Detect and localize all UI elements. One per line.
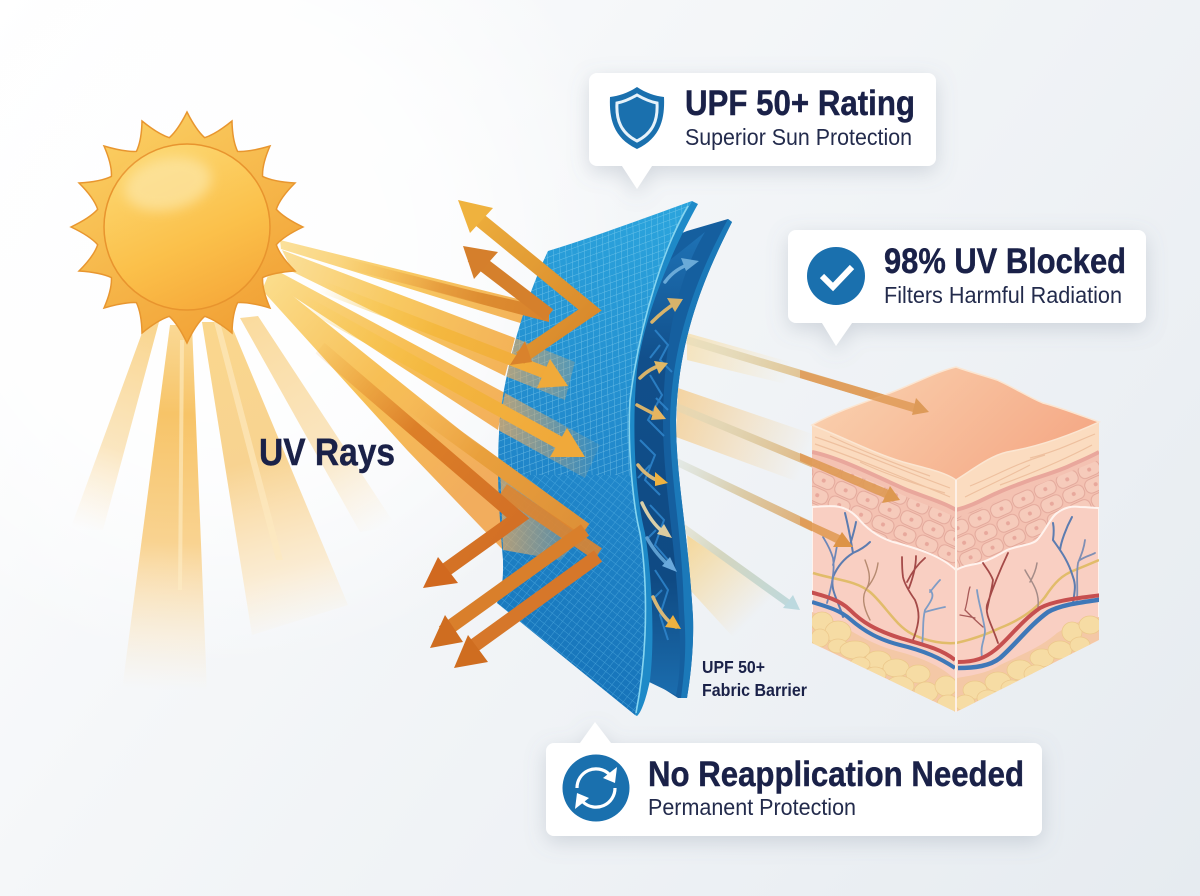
- callout box: [589, 73, 936, 189]
- arrow: incoming dark ray: [420, 279, 549, 322]
- sun disc: [104, 144, 270, 310]
- icon: check mark: [807, 247, 865, 305]
- sun: [71, 112, 303, 343]
- downward sun rays: [70, 316, 396, 690]
- callout: UPF 50+ Rating: [589, 73, 936, 189]
- arrow: chevron two incoming: [410, 403, 585, 530]
- nerve left: [813, 573, 956, 643]
- sun spikes: [71, 112, 303, 343]
- arrow: to skin surface: [800, 370, 916, 412]
- arrow: chevron three outgoing: [468, 556, 598, 650]
- skin left face: [812, 426, 955, 712]
- arrow: fading ray head: [783, 595, 800, 610]
- arrow: reflected ray up-left: [472, 256, 549, 315]
- transmitted arrow shafts leaving the fabric, drawn behind it: [660, 331, 916, 606]
- arrow: to dermis: [800, 517, 842, 544]
- transmitted arrowheads on fabric: [537, 359, 585, 457]
- capillaries left: [823, 513, 945, 645]
- reflected arrows: lower chevrons: [320, 348, 598, 668]
- skin cross-section cube: [805, 367, 1105, 720]
- rays striking the fabric: [262, 240, 535, 550]
- callout box: [546, 722, 1042, 836]
- icon: refresh: [562, 754, 630, 822]
- callout subheading: Filters Harmful Radiation: [884, 282, 1122, 308]
- reflected arrows: upper chevrons: [420, 200, 590, 365]
- artery and vein right: [958, 595, 1102, 662]
- callout heading: UPF 50+ Rating: [685, 84, 915, 123]
- arrow: to epidermis: [800, 453, 889, 498]
- callout: No Reapplication Needed: [546, 722, 1042, 836]
- label: UPF 50+ Fabric Barrier: UPF 50+: [702, 657, 765, 677]
- callout heading: No Reapplication Needed: [648, 755, 1024, 794]
- label: UPF 50+ Fabric Barrier: Fabric Barrier: [702, 680, 807, 700]
- arrow shafts crossing the fabric: [300, 286, 560, 443]
- skin right face: [955, 420, 1105, 720]
- cube centre edge: [955, 480, 957, 712]
- pale transmitted glow behind the fabric: [676, 333, 830, 640]
- small curved arrows inside the fabric gap: [637, 258, 699, 629]
- artery and vein left: [810, 592, 955, 660]
- callout: 98% UV Blocked: [788, 230, 1146, 346]
- callout subheading: Permanent Protection: [648, 794, 856, 820]
- arrow: chevron one: [320, 348, 518, 574]
- callout heading: 98% UV Blocked: [884, 242, 1126, 281]
- callout subheading: Superior Sun Protection: [685, 124, 912, 150]
- sun highlight: [120, 149, 216, 219]
- back fabric layer: [640, 219, 732, 698]
- label: UPF 50+ Fabric Barrier: [702, 657, 807, 700]
- dermis left: [812, 506, 956, 712]
- arrow: chevron two outgoing: [443, 530, 585, 632]
- fabric barrier: [490, 195, 732, 720]
- front fabric layer with woven mesh: [497, 201, 692, 715]
- icon: shield: [610, 87, 664, 149]
- label: UV Rays: UV Rays: [259, 432, 395, 474]
- transmitted arrows reaching the skin: [783, 370, 929, 610]
- fat right: [956, 617, 1099, 712]
- nerve right: [956, 560, 1099, 643]
- arrow: reflected chevron: [470, 212, 590, 358]
- skin top surface: [812, 367, 1099, 480]
- rays passing through the fabric (translucent): [498, 338, 600, 560]
- fat left: [812, 612, 956, 712]
- arrow: chevron three incoming: [503, 490, 598, 554]
- fabric rim: [629, 201, 698, 716]
- dermis right: [956, 507, 1099, 712]
- fabric gap with fibres: [620, 232, 705, 695]
- callout box: [788, 230, 1146, 346]
- capillaries right: [960, 517, 1095, 657]
